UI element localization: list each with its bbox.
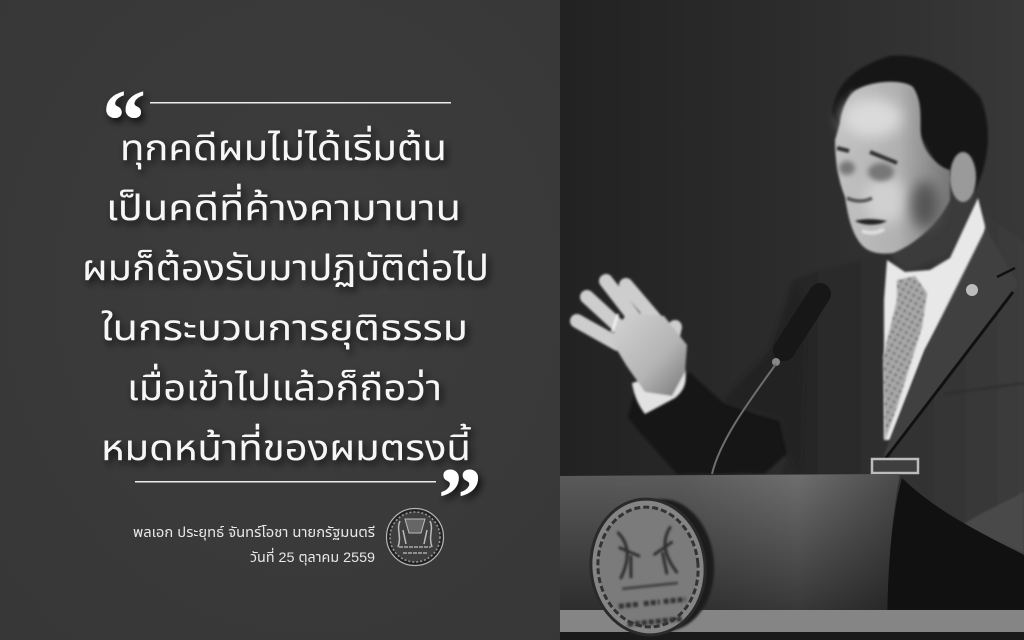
quote line 5: เมื่อเข้าไปแล้วก็ถือว่า <box>127 363 442 408</box>
top rule <box>150 102 451 104</box>
palm <box>610 312 687 396</box>
far arm <box>960 492 1024 553</box>
speaker name and title: พลเอก ประยุทธ์ จันทร์โอชา นายกรัฐมนตรี <box>133 524 375 541</box>
quote line 1: ทุกคดีผมไม่ได้เริ่มต้น <box>120 125 447 169</box>
lapel notch <box>997 268 1015 277</box>
shirt collar <box>884 198 985 440</box>
microphone collar <box>772 358 780 366</box>
water glass on podium <box>872 459 918 473</box>
seal shadow backing <box>610 496 718 634</box>
shirt cuff <box>632 368 686 414</box>
lapel edge <box>886 292 1013 458</box>
patterned tie <box>883 276 927 440</box>
seal base <box>622 583 678 589</box>
forehead highlight <box>842 98 902 138</box>
podium base <box>560 632 1024 640</box>
microphone head <box>784 294 820 350</box>
seal lettering <box>619 599 688 625</box>
quote line 3: ผมก็ต้องรับมาปฏิบัติต่อไป <box>82 247 489 288</box>
bottom rule <box>135 481 436 482</box>
icon: government seal <box>386 508 444 566</box>
brows <box>837 148 897 163</box>
seal inner ring <box>592 502 704 632</box>
podium shading <box>560 474 900 640</box>
microphone <box>712 294 820 474</box>
face <box>835 82 950 254</box>
neck shadow <box>880 165 978 272</box>
seal disc <box>386 508 444 566</box>
seal lions <box>616 527 677 578</box>
hair <box>832 56 988 190</box>
upper arm <box>722 282 805 470</box>
quote line 4: ในกระบวนการยุติธรรม <box>101 307 468 349</box>
fingers and thumb <box>577 281 675 358</box>
quote text <box>82 125 489 468</box>
cheek highlight <box>863 176 907 224</box>
seal urn <box>405 519 425 533</box>
eye bags <box>839 161 894 181</box>
podium front <box>560 474 900 640</box>
microphone stem <box>712 364 776 474</box>
raised hand <box>577 281 687 414</box>
attribution <box>133 524 375 566</box>
seal disc <box>584 493 712 640</box>
photo: prime minister speaking at podium <box>560 0 1024 640</box>
podium trim band <box>560 610 1024 632</box>
jacket lapel <box>883 228 1018 457</box>
ear <box>950 152 976 202</box>
seal base <box>399 547 431 553</box>
quote line 2: เป็นคดีที่ค้างคามานาน <box>106 183 461 228</box>
mouth <box>855 219 887 225</box>
ring <box>612 314 618 332</box>
lapel pin <box>966 284 978 296</box>
lip <box>862 229 884 233</box>
panel: quote background <box>0 0 560 640</box>
jaw shadow <box>911 181 939 229</box>
podium side wing <box>887 478 1024 640</box>
quote line 6: หมดหน้าที่ของผมตรงนี้ <box>101 423 471 468</box>
closing quotation mark: ” <box>438 451 482 548</box>
date: วันที่ 25 ตุลาคม 2559 <box>250 547 375 566</box>
podium seal <box>584 493 712 640</box>
seal lions <box>398 521 432 547</box>
photo backdrop <box>560 0 1024 640</box>
seal inner ring <box>390 512 440 562</box>
nose shadow <box>847 198 872 201</box>
facial features <box>837 148 897 233</box>
suit body <box>780 215 1024 560</box>
jacket pocket line <box>945 383 1024 394</box>
dark sleeve <box>628 373 788 474</box>
opening quotation mark: “ <box>102 73 146 170</box>
